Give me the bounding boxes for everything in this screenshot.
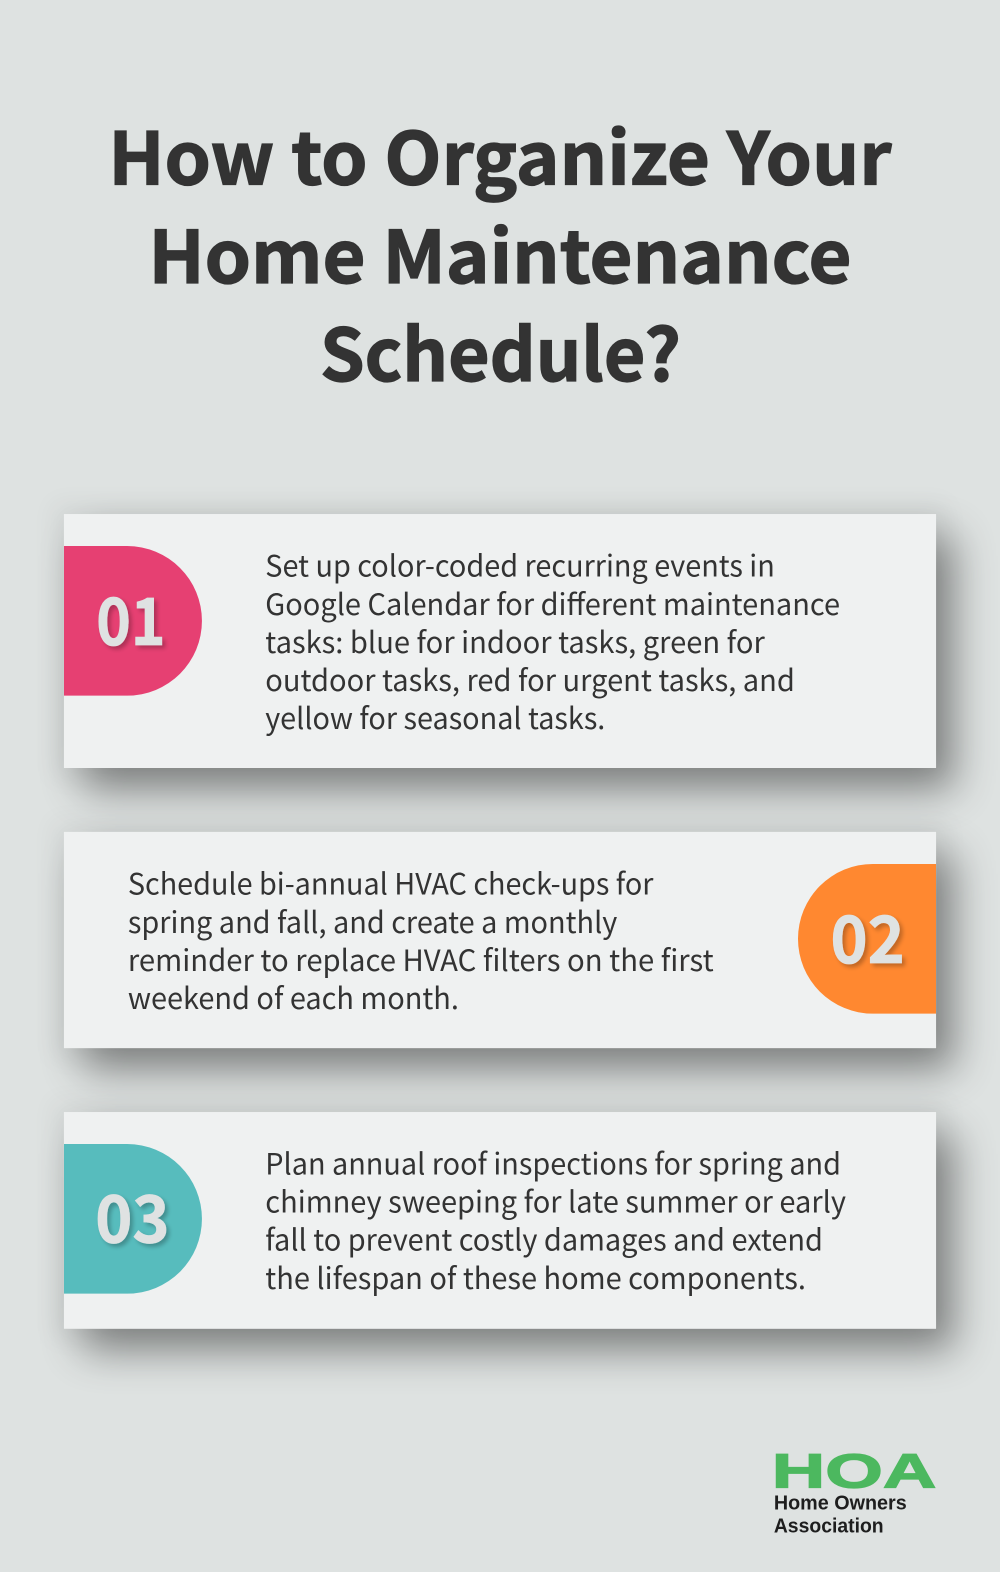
- text: step 02: [128, 861, 714, 1018]
- text: step 01: yellow for seasonal tasks.: [265, 695, 605, 738]
- text: step 01: Set up color-coded recurring events in: [265, 543, 775, 586]
- logo tagline: [774, 1493, 907, 1538]
- title: [108, 101, 892, 402]
- text: step 02: spring and fall, and create a monthly: [128, 899, 618, 942]
- text: step 02: weekend of each month.: [128, 975, 459, 1018]
- badge 01: 01: [96, 569, 165, 664]
- title: How to Organize Your: [108, 101, 892, 206]
- badge 02: 02: [830, 887, 905, 982]
- text: step 03: the lifespan of these home components.: [265, 1255, 806, 1298]
- logo letters HOA: HOA: [772, 1444, 936, 1498]
- card background 01: [64, 514, 936, 768]
- title: Home Maintenance: [148, 199, 852, 304]
- text: step 01: tasks: blue for indoor tasks, green for: [265, 619, 765, 662]
- logo tagline: Home Owners: [774, 1493, 907, 1515]
- card background 03: [64, 1112, 936, 1329]
- text: step 01: Google Calendar for different maintenance: [265, 581, 840, 624]
- text: step 03: Plan annual roof inspections for spring and: [265, 1141, 841, 1184]
- badge 03: [64, 1144, 202, 1294]
- text: step 03: chimney sweeping for late summer or early: [265, 1179, 847, 1222]
- text: step 02: Schedule bi-annual HVAC check-ups for: [128, 861, 654, 904]
- logo tagline: Association: [774, 1516, 884, 1538]
- badge 01: [64, 546, 202, 696]
- badge 03: 03: [95, 1167, 170, 1262]
- text: step 01: outdoor tasks, red for urgent tasks, and: [265, 657, 795, 700]
- title: Schedule?: [320, 297, 681, 402]
- text: step 03: [265, 1141, 847, 1298]
- card background 02: [64, 832, 936, 1048]
- panel: step 01: [64, 514, 936, 768]
- panel: step 02: [64, 832, 936, 1048]
- text: step 02: reminder to replace HVAC filters on the first: [128, 937, 714, 980]
- badge 02: [798, 864, 936, 1014]
- panel: step 03: [64, 1112, 936, 1329]
- text: step 03: fall to prevent costly damages and extend: [265, 1217, 823, 1260]
- logo: HOA: [772, 1444, 936, 1538]
- text: step 01: [265, 543, 840, 738]
